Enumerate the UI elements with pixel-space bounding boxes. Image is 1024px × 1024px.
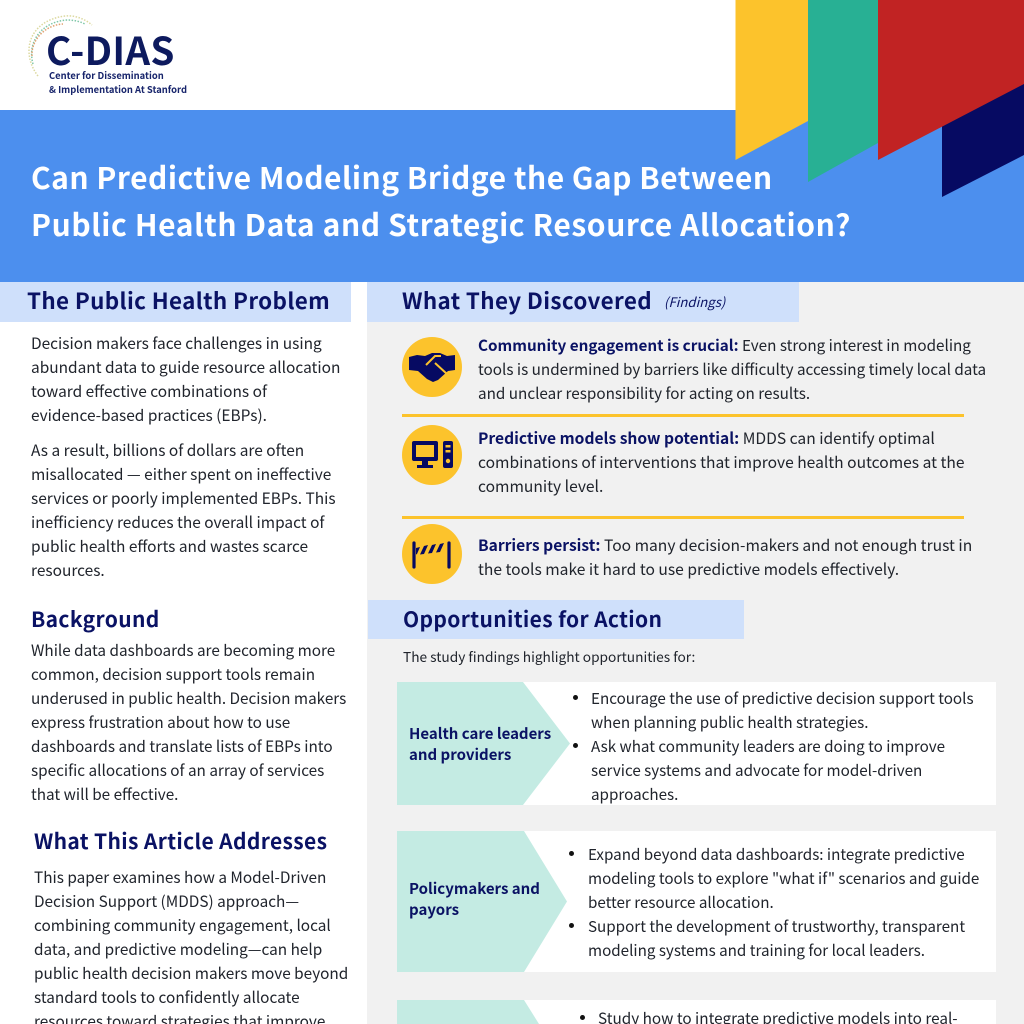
text: problem: Decision makers face challenges in using (31, 332, 322, 354)
text: article: data, and predictive modeling—can help (34, 938, 322, 960)
text: background: that will be effective. (31, 783, 178, 805)
row label: Health care leaders (409, 723, 551, 744)
text: article: This paper examines how a Model-Driven (34, 866, 326, 888)
heading: Opportunities for Action: Opportunities for Action (403, 604, 662, 634)
text: misallocation: misallocated — either spent on ineffective (31, 463, 331, 485)
bullets: service systems and advocate for model-driven (591, 759, 922, 781)
text: background: While data dashboards are becoming more (31, 639, 335, 661)
logo: C-DIAS (28, 15, 187, 96)
row label: Policymakers and (409, 878, 540, 899)
text: background (31, 639, 346, 805)
logo arc of dots (28, 15, 92, 76)
finding 1: tools is undermined by barriers like difficulty accessing timely local data (478, 358, 986, 380)
text: problem: evidence-based practices (EBPs). (31, 404, 267, 426)
heading: The Public Health Problem: The Public Health Problem (27, 284, 330, 316)
finding 2: Predictive models show potential: MDDS can identify optimal (478, 427, 935, 449)
bullets (591, 687, 974, 805)
text: background: underused in public health. Decision makers (31, 687, 346, 709)
finding 3: Barriers persist: Too many decision-makers and not enough trust in (478, 534, 972, 556)
icon: computer (402, 425, 462, 485)
bullets: Encourage the use of predictive decision support tools (591, 687, 974, 709)
logo subtitle (49, 68, 187, 96)
finding 2 (478, 427, 964, 497)
row label: and providers (409, 744, 511, 765)
arrow label shape (397, 1000, 539, 1024)
heading: Background: Background (31, 604, 160, 634)
finding 1: and unclear responsibility for acting on results. (478, 382, 810, 404)
heading: What They Discovered (367, 282, 799, 322)
decorative ribbons (736, 0, 1024, 197)
text: misallocation (31, 439, 336, 581)
finding 2: combinations of interventions that improve health outcomes at the (478, 451, 964, 473)
bullets (588, 843, 979, 961)
row label (409, 878, 540, 920)
finding 1 (478, 334, 986, 404)
row: researchers (397, 1000, 996, 1024)
text: article (34, 866, 348, 1024)
row label: payors (409, 899, 459, 920)
bullets: better resource allocation. (588, 891, 774, 913)
bullets: modeling systems and training for local leaders. (588, 939, 925, 961)
text: problem: toward effective combinations of (31, 380, 267, 402)
right column background (367, 282, 1024, 1024)
finding 1: Community engagement is crucial: Even strong interest in modeling (478, 334, 971, 356)
text: misallocation: services or poorly implemented EBPs. This (31, 487, 336, 509)
heading: What They Discovered: What They Discovered (402, 284, 652, 316)
bullets: Ask what community leaders are doing to improve (591, 735, 945, 757)
text: article: public health decision makers move beyond (34, 962, 348, 984)
text: problem: abundant data to guide resource allocation (31, 356, 340, 378)
text: misallocation: As a result, billions of dollars are often (31, 439, 304, 461)
text: misallocation: resources. (31, 559, 105, 581)
text: article: combining community engagement, local (34, 914, 331, 936)
bullets: when planning public health strategies. (591, 711, 868, 733)
bullets: modeling tools to explore "what if" scenarios and guide (588, 867, 979, 889)
logo wordmark: C-DIAS (46, 21, 175, 77)
arrow label shape (397, 682, 570, 805)
heading: What This Article Addresses: What This Article Addresses (34, 826, 327, 856)
title: Can Predictive Modeling Bridge the Gap Between (31, 154, 773, 198)
bullets: approaches. (591, 783, 678, 805)
text: misallocation: public health efforts and wastes scarce (31, 535, 308, 557)
bullets: Support the development of trustworthy, transparent (588, 915, 965, 937)
text: background: express frustration about how to use (31, 711, 290, 733)
text: background: dashboards and translate lists of EBPs into (31, 735, 333, 757)
logo subtitle: Center for Dissemination (49, 68, 164, 82)
icon: barrier (402, 524, 462, 584)
arrow label shape (397, 831, 567, 972)
heading: What They Discovered: (Findings) (664, 292, 725, 311)
row label (409, 723, 551, 765)
text: background: specific allocations of an array of services (31, 759, 324, 781)
heading: Opportunities for Action (368, 600, 744, 639)
icon: handshake (402, 337, 462, 397)
bullets: Expand beyond data dashboards: integrate predictive (588, 843, 965, 865)
banner (0, 110, 1024, 282)
text: misallocation: inefficiency reduces the overall impact of (31, 511, 324, 533)
row: health care leaders (397, 682, 996, 805)
logo subtitle: & Implementation At Stanford (49, 82, 187, 96)
text: intro: The study findings highlight opportunities for: (403, 646, 695, 666)
heading: The Public Health Problem (0, 282, 351, 322)
text: article: Decision Support (MDDS) approach— (34, 890, 299, 912)
finding 3: the tools make it hard to use predictive models effectively. (478, 558, 899, 580)
text: background: common, decision support tools remain (31, 663, 315, 685)
row: policymakers (397, 831, 996, 972)
finding 3 (478, 534, 972, 580)
title: Public Health Data and Strategic Resource Allocation? (31, 201, 851, 245)
finding 2: community level. (478, 475, 603, 497)
title (31, 154, 851, 245)
text: problem (31, 332, 340, 426)
text: article: standard tools to confidently allocate (34, 986, 300, 1008)
